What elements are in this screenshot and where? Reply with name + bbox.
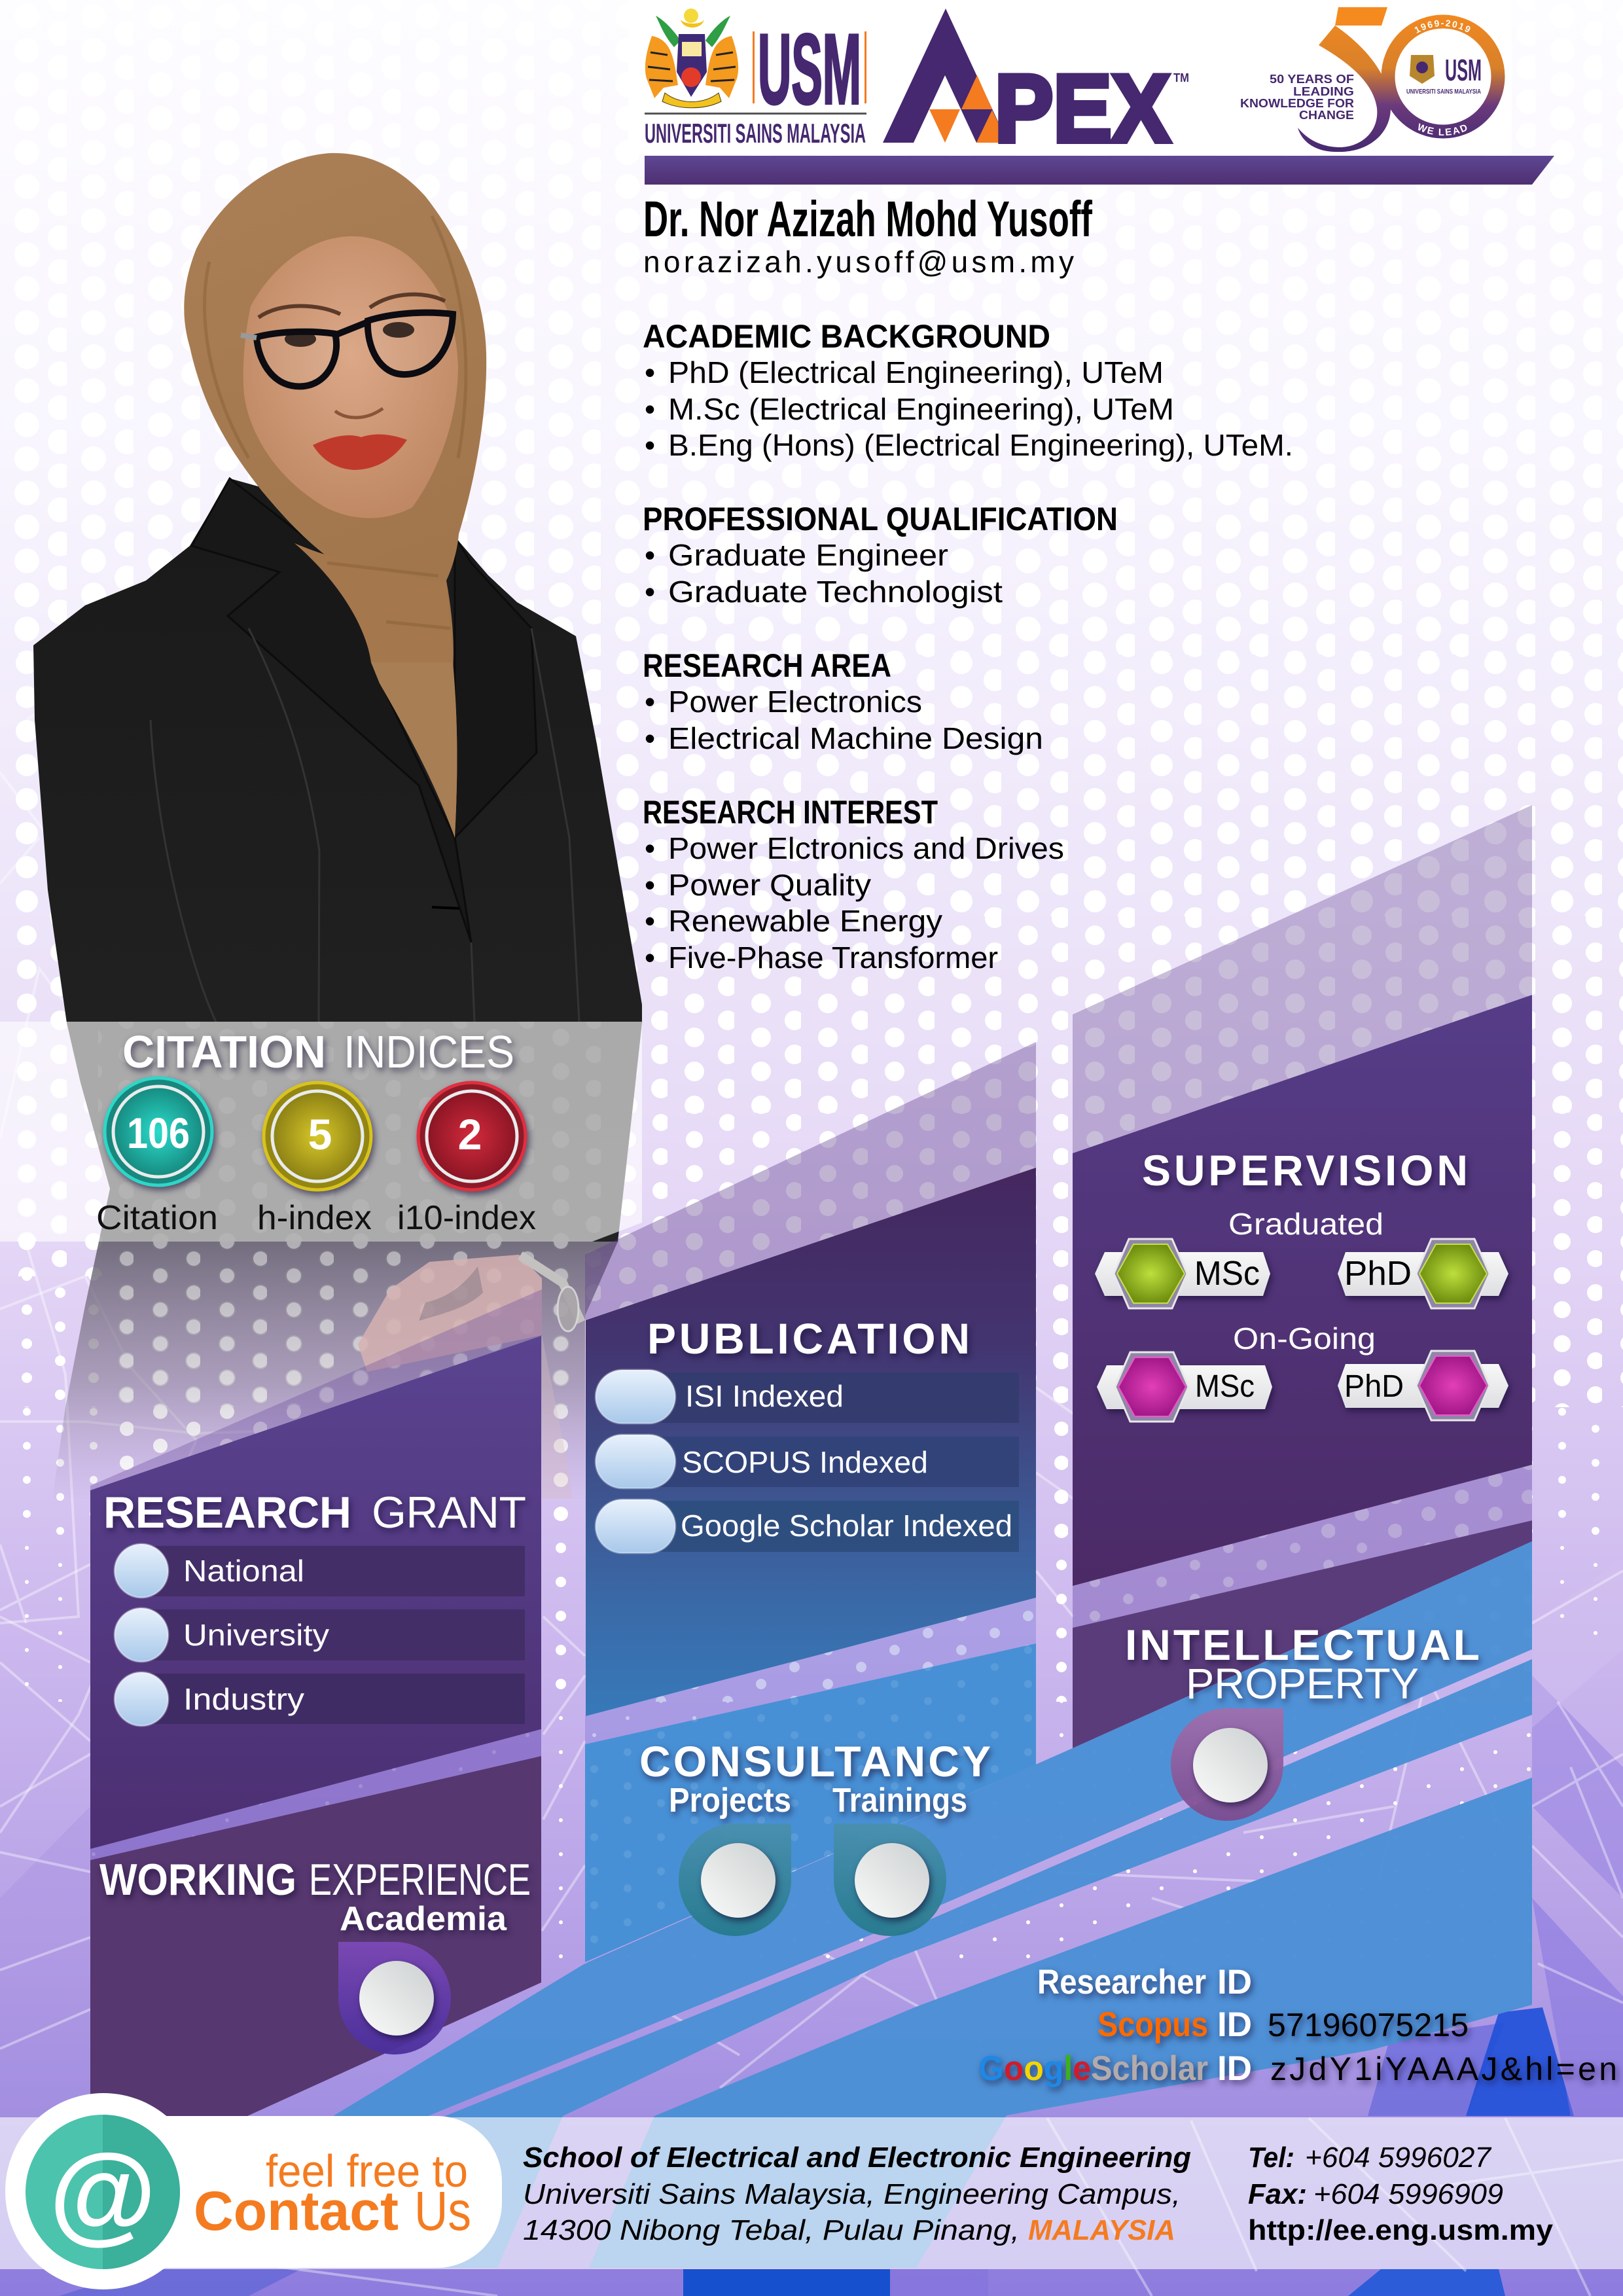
heading: citation indices: CITATION [122,1026,326,1077]
panel: consultancy [585,1643,1036,1962]
badge: graduated PhD: PhD [1344,1255,1412,1293]
logo: 50 years: 1969-2019 [1415,20,1471,33]
label: graduated: Graduated [1228,1207,1383,1241]
label: academia: Academia [340,1900,507,1938]
badge: graduated MSc [1095,1239,1270,1308]
panel: research grant [90,1289,542,1860]
badge: i10-index [418,1083,526,1190]
labels: indices: i10-index [397,1199,536,1237]
section: research interest: • [645,831,655,865]
id: google scholar: zJdY1iYAAAJ&hl=en [1270,2051,1617,2087]
id: scopus: Scopus [1097,2005,1208,2044]
id: researcher: ID [1217,1963,1252,2001]
section: research interest: Five-Phase Transformer [668,941,998,975]
contact details: Fax: [1248,2178,1307,2210]
logo: 50 years: KNOWLEDGE FOR [1240,97,1354,110]
section: professional qualification: Graduate Engineer [668,538,948,572]
section: research interest: Power Elctronics and Drives [668,831,1064,865]
section: academic background: B.Eng (Hons) (Electrical Engineering), UTeM. [668,428,1293,462]
heading: working experience: WORKING [99,1855,296,1905]
heading: research grant [103,1488,526,1537]
heading: supervision: SUPERVISION [1142,1146,1468,1194]
address block [523,2142,1191,2246]
address block: Universiti Sains Malaysia, Engineering Campus, [523,2178,1181,2210]
id: scopus [1097,2005,1469,2044]
logo: 50 years: LEADING [1293,85,1354,98]
badge: on-going MSc: MSc [1195,1369,1255,1404]
label: on-going: On-Going [1233,1321,1376,1355]
section: research area: • [645,685,655,719]
name: Dr. Nor Azizah Mohd Yusoff [643,191,1092,247]
heading: research grant: RESEARCH [103,1488,351,1537]
logo: 50 years: CHANGE [1299,109,1354,122]
contact details: http://ee.eng.usm.my [1248,2214,1554,2246]
logo: USM wordmark: UNIVERSITI SAINS MALAYSIA [645,118,866,149]
id: google scholar: Google [978,2049,1091,2088]
badge: h-index: 5 [308,1110,332,1158]
header logos [645,7,1505,162]
logo: 50 years: UNIVERSITI SAINS MALAYSIA [1406,88,1481,96]
researcher IDs [978,1963,1617,2088]
contact panel [5,2093,502,2289]
logo: 50 years: USM [1445,53,1482,87]
email: norazizah.yusoff@usm.my [643,245,1074,279]
address block: MALAYSIA [1028,2214,1175,2246]
logo: 50 years: WE LEAD [1418,123,1467,135]
item: university: University [183,1618,329,1652]
icon: trainings drop [834,1823,946,1936]
badge: on-going MSc [1097,1352,1272,1422]
section: research area: Power Electronics [668,685,922,719]
heading: consultancy: CONSULTANCY [639,1737,991,1785]
item: national: National [183,1554,304,1588]
badge: citation count: 106 [127,1109,190,1157]
labels: indices: h-index [257,1199,372,1237]
header logos: USM [758,14,861,125]
badge: citation count [105,1078,212,1185]
panel: working experience [90,1756,541,2116]
label: trainings: Trainings [832,1782,967,1820]
id: scopus: ID [1217,2005,1252,2044]
icon: at sign [26,2115,180,2269]
contact details: Tel: [1248,2142,1294,2174]
icon: at sign: @ [49,2131,156,2254]
section: academic background: PhD (Electrical Engineering), UTeM [668,355,1164,389]
icon: property drop [1171,1708,1283,1821]
id: google scholar: ID [1217,2049,1252,2088]
section: professional qualification: PROFESSIONAL QUALIFICATION [643,501,1118,537]
section: research area [643,647,1043,755]
panel: publication [585,1042,1036,1744]
logo: APEX: PEX [995,55,1170,162]
item: national [115,1544,525,1598]
section: academic background: • [645,392,655,426]
citation indices band [0,1022,642,1242]
label: projects: Projects [669,1782,791,1820]
labels: indices [96,1199,536,1237]
heading: working experience: EXPERIENCE [309,1855,531,1905]
badge: h-index [264,1083,371,1190]
blue diagonal stripes [196,1541,1532,2268]
id: researcher: Researcher [1037,1963,1206,2001]
section: research interest: Power Quality [668,868,871,902]
section: research area: • [645,721,655,755]
icon: projects drop [679,1823,791,1936]
section: research area: Electrical Machine Design [668,721,1043,755]
section: research interest: RESEARCH INTEREST [643,794,938,831]
section: research interest: • [645,904,655,938]
white logo backing [628,0,1512,154]
badge: graduated PhD [1338,1239,1508,1308]
icon: academia drop [338,1942,451,2054]
section: academic background: ACADEMIC BACKGROUND [643,318,1050,355]
section: research interest [643,794,1064,975]
item: ISI indexed [596,1370,1019,1424]
item: industry: Industry [183,1682,304,1716]
portrait: jacket, scarf and face [33,153,642,1242]
address block: School of Electrical and Electronic Engineering [523,2142,1191,2174]
heading: working experience [99,1855,531,1905]
text: feel free to: feel free to [266,2145,468,2197]
heading: intellectual: INTELLECTUAL [1125,1621,1480,1669]
section: research interest: • [645,868,655,902]
badge: graduated MSc: MSc [1194,1255,1260,1293]
badge: i10-index: 2 [458,1110,482,1158]
section: academic background: • [645,355,655,389]
logo: USM crest [645,9,738,108]
header bar [645,156,1554,185]
section: professional qualification: • [645,575,655,609]
footer band [0,2117,1623,2269]
heading: citation indices: INDICES [344,1026,514,1077]
section: research interest: • [645,941,655,975]
contact details [1248,2142,1554,2246]
panel: supervision [1073,805,1532,1628]
logo: APEX [883,9,1189,162]
id: google scholar [978,2049,1617,2088]
section: professional qualification: • [645,538,655,572]
text: contact us: Us [414,2180,471,2242]
section: professional qualification: Graduate Technologist [668,575,1003,609]
portrait: lower body fading out [52,1242,618,1503]
id: google scholar: Scholar [1091,2049,1208,2088]
logo: USM wordmark [645,14,866,149]
section: professional qualification [643,501,1118,609]
contact details: +604 5996909 [1313,2178,1503,2210]
badge: on-going PhD [1338,1351,1508,1420]
labels: indices: Citation [96,1199,218,1237]
item: ISI indexed: ISI Indexed [685,1379,844,1413]
section: academic background [643,318,1293,462]
section: academic background: M.Sc (Electrical Engineering), UTeM [668,392,1174,426]
badge: on-going PhD: PhD [1344,1369,1404,1404]
section: research interest: Renewable Energy [668,904,942,938]
section: academic background: • [645,428,655,462]
item: SCOPUS indexed [596,1435,1019,1488]
item: Google Scholar indexed [596,1499,1019,1553]
heading: citation indices [122,1026,514,1077]
contact details: +604 5996027 [1305,2142,1492,2174]
item: SCOPUS indexed: SCOPUS Indexed [682,1445,928,1479]
text: contact us: Contact [194,2180,399,2242]
logo: APEX: TM [1173,71,1189,84]
panel: intellectual property [1073,1520,1532,1821]
logo: 50 years: 50 YEARS OF [1270,73,1354,86]
item: Google Scholar indexed: Google Scholar Indexed [681,1509,1012,1543]
heading: publication: PUBLICATION [647,1314,970,1363]
heading: research grant: GRANT [372,1488,526,1537]
logo: 50 years [1240,7,1505,152]
heading: property: PROPERTY [1186,1659,1419,1708]
profile text block [643,191,1293,975]
address block: 14300 Nibong Tebal, Pulau Pinang, [523,2214,1020,2246]
id: scopus: 57196075215 [1268,2007,1469,2043]
section: research area: RESEARCH AREA [643,647,891,684]
item: university [115,1608,525,1662]
item: industry [115,1672,525,1726]
